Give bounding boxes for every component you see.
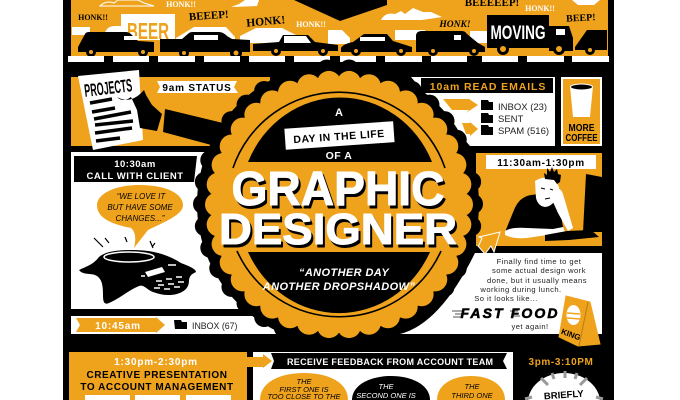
heading: a day in the life of a: A	[335, 107, 343, 119]
coffee label: MORE	[568, 123, 595, 134]
bottom black cap	[248, 252, 430, 313]
speech bubble: “WE LOVE IT	[117, 192, 166, 201]
tagline: ANOTHER DROPSHADOW”	[262, 281, 415, 293]
lunch paragraph	[474, 257, 587, 303]
honk labels	[78, 0, 596, 30]
icon: hand and arm	[117, 90, 223, 146]
scalloped orange ring	[211, 76, 467, 332]
arrow: to feedback	[247, 354, 272, 368]
ribbon: 9am status: 9am STATUS	[162, 83, 232, 94]
feedback bubble three: THE	[464, 382, 480, 391]
arrow: down chevron	[294, 0, 387, 21]
top black cap	[248, 98, 432, 162]
icon: coffee cup	[570, 84, 593, 117]
email list: SENT	[498, 114, 524, 125]
honk labels: BEEEP!	[189, 9, 229, 23]
title badge	[197, 63, 479, 345]
feedback bubble two: THE	[378, 382, 394, 391]
icon: clouds	[100, 0, 600, 20]
fast food label: FAST FOOD	[460, 305, 558, 321]
tagline: “ANOTHER DAY	[299, 267, 390, 279]
icon: folders	[481, 100, 493, 135]
feedback bubble three	[437, 376, 505, 400]
heading: a day in the life of a: OF A	[326, 150, 352, 162]
feedback bubble one: THE	[296, 377, 312, 386]
honk labels: HONK!!	[296, 20, 326, 29]
lunch paragraph: working during lunch.	[479, 285, 562, 294]
presentation time: 1:30pm-2:30pm	[114, 357, 198, 368]
presentation title: TO ACCOUNT MANAGEMENT	[80, 382, 234, 393]
panel: lunch text	[400, 246, 602, 346]
lunch paragraph: Finally find time to get	[497, 257, 582, 266]
presentation title	[80, 370, 234, 393]
tagline	[262, 267, 415, 293]
honk labels: BEEP!	[566, 12, 596, 25]
email header: 10am READ EMAILS	[430, 81, 546, 93]
coffee label	[566, 123, 598, 144]
heading: graphic designer: DESIGNER	[219, 205, 457, 254]
time label: 11:30am-1:30pm	[497, 158, 585, 169]
inbox label: INBOX (67)	[192, 321, 238, 331]
honk labels: HONK!!	[166, 0, 196, 9]
arc lines	[233, 92, 445, 317]
heading: graphic designer: DESIGNER	[221, 208, 459, 257]
time label: 3pm-3:10PM	[529, 357, 593, 368]
speech bubble: BUT HAVE SOME	[107, 203, 173, 212]
icon: burger bag	[559, 296, 600, 346]
heading: a day in the life of a	[284, 107, 395, 162]
arrow: 10:45am	[76, 317, 165, 333]
coffee label: COFFEE	[566, 133, 598, 144]
honk labels: HONK!!	[525, 4, 555, 13]
background vehicles	[72, 14, 492, 44]
panel: 9am status	[71, 70, 270, 150]
road markings	[68, 56, 609, 62]
icon: projects document: PROJECTS	[83, 75, 133, 101]
icon: conference phone	[79, 250, 196, 304]
feedback banner: RECEIVE FEEDBACK FROM ACCOUNT TEAM	[287, 357, 493, 367]
sound lines	[94, 237, 155, 248]
icon: tired designer	[505, 167, 599, 241]
icon: burger bag: KING	[560, 327, 582, 342]
icon: monitor	[583, 174, 602, 232]
honk labels: HONK!!	[78, 13, 108, 22]
feedback bubble three: THIRD ONE	[451, 391, 494, 400]
panel: 11:30am-1:30pm	[476, 153, 602, 246]
panel: read emails	[411, 77, 555, 146]
panel: 10:45am	[71, 316, 276, 334]
lunch paragraph: done, but it usually means	[487, 276, 587, 285]
icon: projects document	[78, 70, 143, 150]
panel: traffic jam	[71, 0, 608, 59]
arrow: 10:45am: 10:45am	[95, 321, 141, 332]
lunch paragraph: some actual design work	[492, 266, 586, 275]
icon: folder	[174, 320, 187, 329]
call header	[74, 156, 197, 182]
honk labels: HONK!	[438, 20, 471, 30]
panel: account team feedback	[247, 352, 513, 400]
call header: 10:30am	[114, 159, 156, 170]
arrow: up to lunch	[478, 232, 500, 254]
sign: beer: BEER	[127, 18, 169, 44]
honk labels: HONK!	[246, 14, 286, 30]
speech bubble: CHANGES...”	[116, 214, 165, 223]
presentation boards	[85, 395, 231, 400]
feedback bubble two: SECOND ONE IS	[356, 391, 416, 400]
arrows	[443, 97, 478, 136]
heading: graphic designer: GRAPHIC	[234, 166, 446, 219]
yet again: yet again!	[512, 322, 548, 331]
scalloped black ring	[197, 63, 479, 345]
heading: graphic designer: GRAPHIC	[232, 163, 444, 216]
email list: SPAM (516)	[498, 126, 549, 137]
ribbon: day in the life: DAY IN THE LIFE	[293, 128, 385, 146]
feedback banner	[271, 353, 507, 369]
feedback bubble one: FIRST ONE IS	[279, 385, 329, 394]
heading: graphic designer	[219, 163, 459, 257]
panel: more coffee	[561, 77, 602, 146]
panel: briefly contemplate	[525, 357, 603, 400]
feedback bubble one	[260, 373, 348, 400]
vehicle windows and hubs	[89, 29, 592, 56]
email list	[498, 102, 549, 137]
email list: INBOX (23)	[498, 102, 547, 113]
panel: call with client	[71, 152, 246, 309]
lunch paragraph: So it looks like...	[474, 294, 538, 303]
presentation title: CREATIVE PRESENTATION	[86, 370, 228, 381]
vehicles	[78, 15, 607, 59]
panel: creative presentation	[69, 352, 247, 400]
call header: CALL WITH CLIENT	[86, 171, 184, 182]
speech bubble	[97, 185, 183, 248]
sign: moving: MOVING	[490, 23, 546, 44]
feedback bubble two	[352, 376, 430, 400]
